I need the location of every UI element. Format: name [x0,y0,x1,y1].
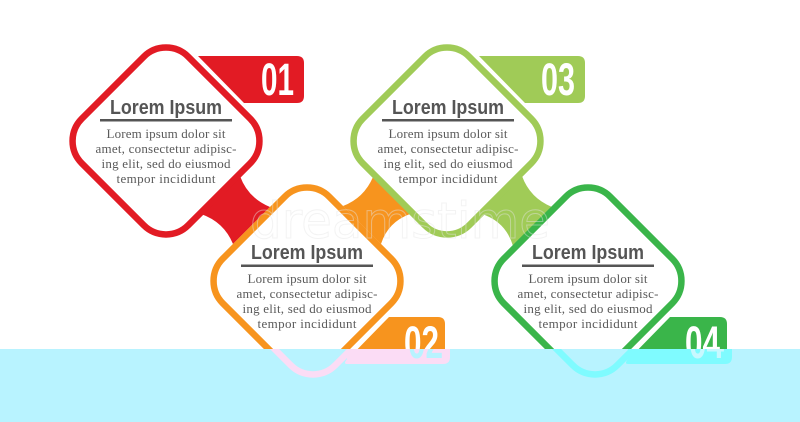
heading 2: Lorem Ipsum [251,242,363,264]
reflection: orange diamond and tag: 02 [408,317,443,368]
body text 4: amet, consectetur adipisc- [518,286,658,301]
body text 1: Lorem ipsum dolor sit [106,126,226,141]
tag: 03 [479,54,585,105]
tag: 02 [358,317,445,349]
watermark: dreamstime [250,192,550,250]
panel: diamond 4 [482,175,694,387]
heading 3: Lorem Ipsum [392,97,504,119]
body text 2 [236,271,378,331]
body text 1: ing elit, sed do eiusmod [102,156,231,171]
reflection: orange diamond and tag [270,349,450,378]
body text 4: ing elit, sed do eiusmod [524,301,653,316]
tag: 01: 01 [261,54,294,105]
body text 3: Lorem ipsum dolor sit [388,126,508,141]
heading 4: Lorem Ipsum [532,242,644,264]
body text 1: amet, consectetur adipisc- [96,141,236,156]
panel: diamond 1 [60,35,272,247]
body text 1: tempor incididunt [116,171,216,186]
heading 1: Lorem Ipsum [110,97,222,119]
divider 3 [382,119,514,122]
body text 3: tempor incididunt [398,171,498,186]
reflection: green diamond and tag: 04 [689,317,724,368]
body text 4: Lorem ipsum dolor sit [528,271,648,286]
body text 2: ing elit, sed do eiusmod [242,301,372,316]
body text 2: tempor incididunt [258,316,357,331]
tag: 02: 02 [404,317,439,368]
body text 4 [518,271,658,331]
body text 3: amet, consectetur adipisc- [378,141,518,156]
connector: red [201,176,270,244]
body text 3 [378,126,518,186]
body text 3: ing elit, sed do eiusmod [384,156,513,171]
divider 1 [100,119,232,122]
tag: 03: 03 [541,54,575,105]
reflection: green diamond and tag [552,349,732,378]
tag: 04: 04 [685,317,720,368]
connector: orange [343,177,410,244]
body text 1 [96,126,236,186]
body text 2: amet, consectetur adipisc- [236,286,378,301]
panel: diamond 2 [201,175,413,387]
body text 4: tempor incididunt [538,316,638,331]
body text 2: Lorem ipsum dolor sit [248,271,367,286]
divider 2 [241,264,373,267]
panel: diamond 3 [341,35,553,247]
divider 4 [522,264,654,267]
connector: light green [482,176,552,246]
tag: 01 [198,54,304,105]
water band [0,349,800,422]
tag: 04 [638,317,727,349]
